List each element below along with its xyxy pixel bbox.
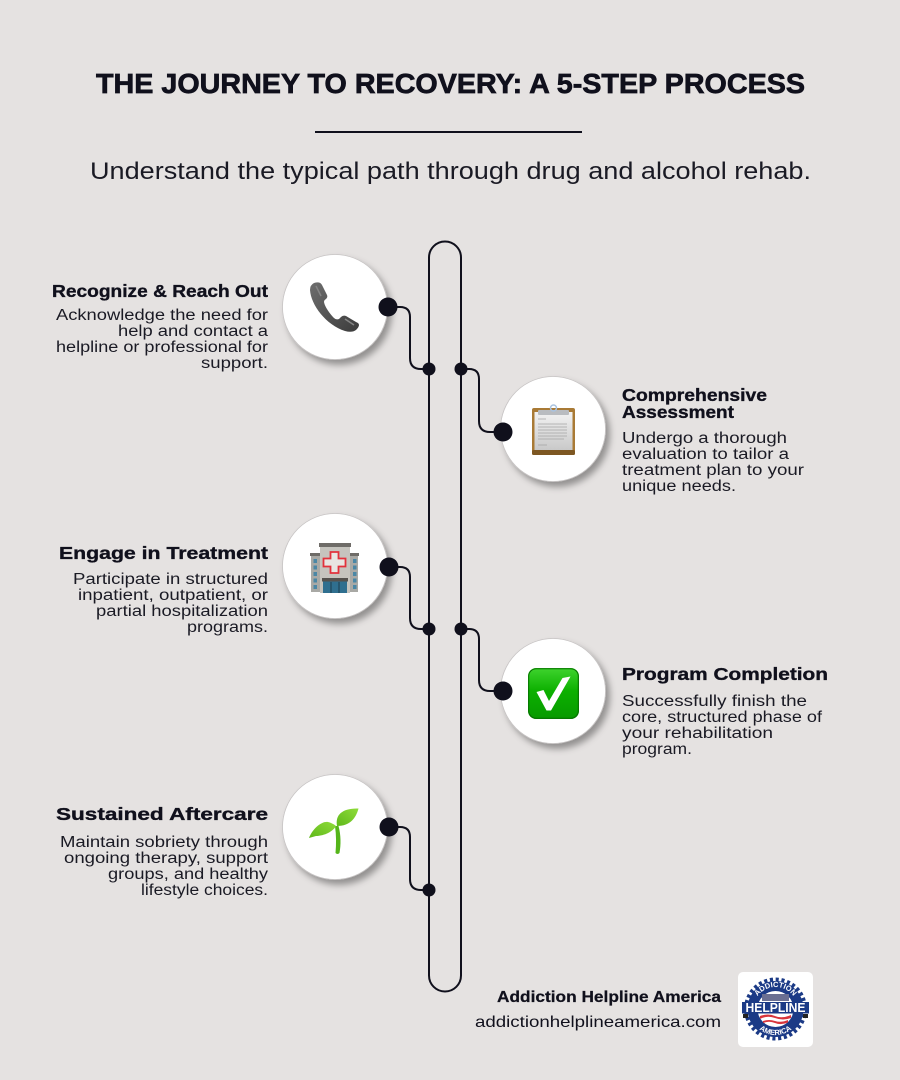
step 5 text: groups, and healthy [108,866,268,883]
logo: Helpline badge: HELPLINE [746,1000,806,1015]
step 1 text: Acknowledge the need for [56,307,268,324]
step 1: Recognize and Reach Out [52,254,436,376]
logo: Helpline badge: AMERICA [759,1026,792,1036]
step 2 text: Assessment [622,402,734,422]
step 4 text [622,664,828,758]
step 2 text: treatment plan to your [622,462,804,479]
connector 4 [461,629,503,691]
step 2 text: Undergo a thorough [622,430,787,447]
icon: seedling [309,808,358,854]
step 5 text [56,804,269,899]
step 1 text: support. [201,355,268,372]
step 5 text: lifestyle choices. [141,882,268,899]
icon: hospital [310,543,359,593]
step 4 text: your rehabilitation [622,725,773,742]
step 4 text: core, structured phase of [622,709,823,726]
step 5 text: Maintain sobriety through [60,834,268,851]
title: THE JOURNEY TO RECOVERY: A 5-STEP PROCESS [96,68,805,99]
step 3 text [59,543,268,636]
step 4 text: Successfully finish the [622,693,807,710]
step 2 text: evaluation to tailor a [622,446,789,463]
step 5 text: ongoing therapy, support [64,850,269,867]
step 4 text: program. [622,741,692,758]
step 3 text: Engage in Treatment [59,543,268,563]
icon: telephone [310,282,359,332]
step 5 text: Sustained Aftercare [56,804,268,824]
step 3 text: partial hospitalization [96,603,268,620]
step 1 text: helpline or professional for [56,339,268,356]
step 3 text: inpatient, outpatient, or [78,587,268,604]
step 2 text: Comprehensive [622,385,767,405]
subtitle: Understand the typical path through drug and alcohol rehab. [90,158,811,185]
footer brand text: addictionhelplineamerica.com [475,1014,721,1031]
step 1 text [52,281,268,372]
step 4: Program Completion [454,622,828,758]
step 4 text: Program Completion [622,664,828,684]
step 5: Sustained Aftercare [56,774,436,899]
connector 3 [389,567,429,629]
connector 1 [388,307,429,369]
connector 2 [461,369,503,432]
connector 5 [389,827,429,890]
step 2: Comprehensive Assessment [454,362,804,495]
logo: Helpline badge: ADDICTION [755,982,797,996]
step 1 text: Recognize & Reach Out [52,281,268,301]
step 1 text: help and contact a [118,323,268,340]
step 3 text: Participate in structured [73,571,268,588]
step 3 text: programs. [187,619,268,636]
icon: clipboard [532,405,575,455]
step 3: Engage in Treatment [59,514,436,636]
central timeline capsule [429,242,461,992]
footer brand text: Addiction Helpline America [497,989,721,1006]
step 2 text [622,385,804,495]
logo: Helpline badge [738,972,813,1047]
footer brand text [475,989,721,1031]
step 2 text: unique needs. [622,478,736,495]
icon: check mark [528,668,579,719]
